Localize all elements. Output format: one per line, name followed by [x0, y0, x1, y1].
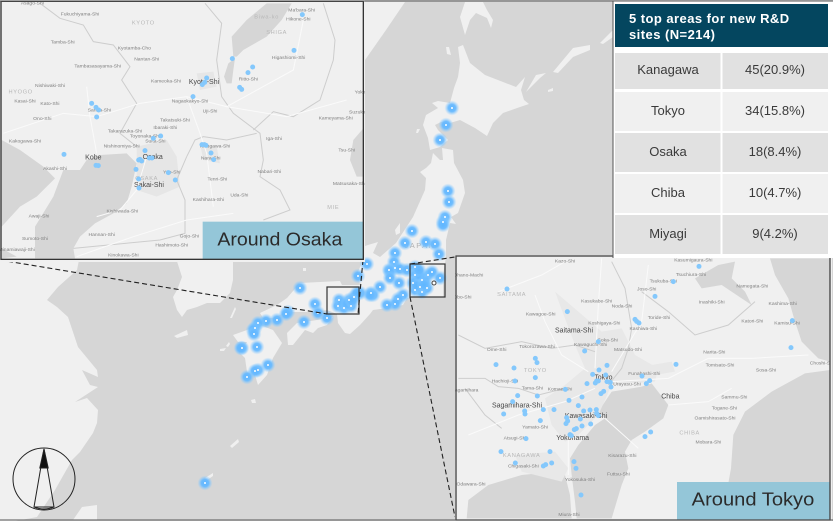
major city labels	[492, 328, 680, 442]
major city labels: Sakai-Shi	[134, 182, 164, 189]
map land: China coast	[0, 255, 98, 524]
city labels: Miura-Shi	[558, 512, 580, 518]
panel: top areas table	[613, 1, 833, 258]
city labels: Sumoto-Shi	[22, 236, 48, 242]
row: Tokyo: 34(15.8%)	[745, 103, 805, 118]
region labels: SHIGA	[266, 30, 287, 36]
label: Around Osaka: Around Osaka	[217, 228, 343, 249]
city labels: Gojo-Shi	[180, 234, 199, 240]
dashed zoom lines	[0, 257, 455, 517]
major city labels: Sagamihara-Shi	[492, 402, 542, 409]
city labels: Kisarazu-Shi	[608, 453, 636, 459]
major city labels: Osaka	[143, 154, 163, 161]
ring marker	[432, 281, 436, 285]
city labels: Akashi-Shi	[43, 166, 67, 172]
prefecture borders	[40, 3, 335, 248]
city labels: Sagamihara	[452, 388, 479, 394]
region labels: KYOTO	[132, 20, 155, 26]
major city labels: Saitama-Shi	[555, 328, 593, 335]
table heading	[615, 4, 828, 47]
city labels: Suzuka	[349, 109, 366, 115]
panel: inset map around Tokyo	[452, 255, 832, 521]
row: Chiba	[615, 174, 828, 213]
city labels: Nagaokakyo-Shi	[172, 99, 208, 105]
city labels: Tsuchiura-Shi	[676, 272, 706, 278]
white marker centres	[204, 107, 453, 484]
city labels: Soka-Shi	[598, 337, 618, 343]
label: Around Osaka	[203, 222, 363, 259]
urban areas	[532, 406, 602, 482]
region labels: CHIBA	[679, 430, 700, 436]
city labels: Sammu-Shi	[721, 395, 747, 401]
city labels: Obo-Shi	[453, 294, 471, 300]
city labels: Oamishirasato-Shi	[694, 416, 735, 422]
row: Tokyo: Tokyo	[651, 103, 685, 118]
city labels: Takarazuka-Shi	[108, 129, 142, 135]
city labels: Kameyama-Shi	[319, 115, 353, 121]
region labels	[8, 14, 339, 211]
city labels: Nishinomiya-Shi	[104, 143, 140, 149]
city labels: Matsudo-Shi	[614, 347, 642, 353]
row: Chiba: Chiba	[651, 185, 686, 200]
major city labels: Chiba	[661, 393, 680, 400]
table heading: 5 top areas for new R&D	[629, 11, 790, 26]
major city labels: Kyoto-Shi	[189, 79, 220, 86]
Osaka Bay and Seto Sea	[2, 3, 363, 258]
city labels: Kyotamba-Cho	[118, 45, 151, 51]
city labels: Nabari-Shi	[258, 169, 281, 175]
major city labels: Tokyo	[594, 374, 613, 381]
city labels: Tomisato-Shi	[706, 363, 734, 369]
city labels: Tama-Shi	[522, 386, 543, 392]
row: Kanagawa	[615, 53, 828, 89]
roads	[468, 258, 808, 475]
city labels: Kashiwa-Shi	[629, 326, 657, 332]
city labels: Tsu-Shi	[338, 148, 355, 154]
city labels: Hannan-Shi	[89, 232, 115, 238]
city labels: Koshigaya-Shi	[588, 320, 620, 326]
label: Around Tokyo: Around Tokyo	[692, 489, 814, 510]
city labels: Suita-Shi	[145, 138, 165, 144]
city labels: Joso-Shi	[637, 286, 656, 292]
city labels: Mobara-Shi	[695, 439, 721, 445]
city labels: Kamisu-Shi	[774, 321, 800, 327]
city labels: Ono-Shi	[33, 116, 51, 122]
region labels: MIE	[327, 205, 339, 211]
city labels: Ma'bara-Shi	[288, 8, 315, 14]
city labels: Higashiomi-Shi	[272, 55, 305, 61]
city labels: Kasai-Shi	[14, 99, 36, 105]
city labels: Hikone-Shi	[286, 17, 311, 23]
city labels: Tamba-Shi	[51, 40, 75, 46]
row: Kanagawa: Kanagawa	[637, 62, 699, 77]
row: Miyagi	[615, 215, 828, 254]
icon: north arrow compass	[13, 448, 75, 510]
city labels: Kasumigaura-Shi	[674, 258, 712, 264]
table heading: sites (N=214)	[629, 27, 715, 42]
site markers around Tokyo	[493, 264, 795, 497]
city labels: Kashihara-Shi	[193, 197, 224, 203]
map land: Korea	[173, 255, 233, 317]
label: Around Tokyo	[677, 482, 830, 520]
panel: inset map around Osaka	[0, 0, 366, 262]
city labels: Sanda-Shi	[88, 107, 111, 113]
city labels: Kameoka-Shi	[151, 78, 181, 84]
city labels: Namegata-Shi	[736, 284, 768, 290]
region labels: KANAGAWA	[503, 453, 540, 459]
Tokyo Bay, Sagami Bay, Pacific, Kasumigaura	[467, 258, 830, 520]
city labels: Futtsu-Shi	[607, 471, 630, 477]
city labels: Funabashi-Shi	[628, 371, 660, 377]
city labels: Yokk	[355, 89, 366, 95]
row: Chiba: 10(4.7%)	[749, 185, 801, 200]
city labels: Sosa-Shi	[756, 368, 776, 374]
city labels	[0, 0, 366, 259]
region labels	[497, 292, 700, 459]
bottom margin	[0, 521, 833, 524]
map land: Honshu	[260, 148, 465, 334]
region labels: OSAKA	[135, 176, 158, 182]
city labels: Hashimoto-Shi	[155, 242, 188, 248]
region labels: Biwa-ko	[254, 14, 279, 20]
city labels: Kinokawa-Shi	[108, 253, 139, 259]
city labels: Komae-Shi	[548, 386, 572, 392]
city labels: Ome-Shi	[487, 347, 507, 353]
city labels: Takatsuki-Shi	[160, 118, 190, 124]
city labels: Toride-Shi	[648, 315, 670, 321]
city labels: Kawagoe-Shi	[526, 312, 555, 318]
city labels: Iga-Shi	[266, 136, 282, 142]
city labels: Atsugi-Shi	[504, 436, 526, 442]
region labels: TOKYO	[524, 368, 547, 374]
city labels: Asago-Shi	[21, 0, 44, 6]
city labels: Uda-Shi	[230, 192, 248, 198]
major city labels: Kobe	[85, 155, 102, 162]
city labels: Kashima-Shi	[769, 301, 797, 307]
city labels: Noda-Shi	[612, 304, 632, 310]
city labels	[452, 258, 831, 518]
city labels: Katori-Shi	[741, 318, 763, 324]
city labels: Ibaraki-Shi	[153, 125, 177, 131]
map land: Shikoku	[287, 317, 333, 345]
map land: Russia, Sakhalin, Kurils and small islands	[73, 2, 613, 520]
map land: Hokkaido	[423, 45, 529, 150]
major city labels	[85, 79, 220, 189]
row: Tokyo	[615, 92, 828, 131]
map land: Kyushu	[233, 325, 282, 385]
city labels: Kakogawa-Shi	[9, 139, 41, 145]
city labels: Narita-Shi	[703, 350, 725, 356]
city labels: Ritto-Shi	[239, 76, 258, 82]
row: Osaka: 18(8.4%)	[749, 144, 801, 159]
region labels: HYOGO	[8, 89, 33, 95]
city labels: Ohano-Machi	[453, 273, 483, 279]
prefecture borders	[458, 262, 755, 428]
city labels: Nantan-Shi	[134, 56, 159, 62]
city labels: Chigasaki-Shi	[508, 464, 539, 470]
city labels: Uji-Shi	[203, 109, 217, 115]
country label: Japan: JAPAN	[404, 241, 436, 250]
city labels: Inashiki-Shi	[699, 299, 725, 305]
city labels: Tambasasayama-Shi	[74, 64, 121, 70]
city labels: Choshi-S	[810, 361, 831, 367]
city labels: Toyonaka-Shi	[130, 133, 160, 139]
city labels: Nara-Shi	[201, 156, 221, 162]
city labels: Togane-Shi	[712, 406, 737, 412]
city labels: Matsusaka-Shi	[333, 181, 366, 187]
region labels: SAITAMA	[497, 292, 526, 298]
city labels: Kato-Shi	[40, 101, 60, 107]
roads	[3, 20, 347, 257]
city labels: Hachioji-Shi	[492, 378, 518, 384]
city labels: Kishiwada-Shi	[107, 208, 138, 214]
city labels: Tokorozawa-Shi	[519, 344, 555, 350]
urban areas	[137, 72, 220, 197]
city labels: Nishiwaki-Shi	[35, 83, 65, 89]
major city labels: Kawasaki-Shi	[565, 413, 608, 420]
city labels: Kizugawa-Shi	[200, 143, 230, 149]
city labels: Tenri-Shi	[207, 176, 227, 182]
city labels: Tsukuba-Shi	[650, 279, 677, 285]
locator box: Tokyo area	[410, 264, 445, 297]
city labels: Kawaguchi-Shi	[574, 342, 607, 348]
city labels: Kazo-Shi	[555, 258, 575, 264]
row: Osaka	[615, 133, 828, 172]
locator box: Osaka area	[327, 287, 359, 314]
city labels: Fukuchiyama-Shi	[61, 12, 99, 18]
city labels: Yao-Shi	[163, 169, 180, 175]
row: Miyagi: 9(4.2%)	[752, 226, 798, 241]
city labels: Odawara-Shi	[456, 482, 486, 488]
row: Kanagawa: 45(20.9%)	[745, 62, 805, 77]
city labels: Yamato-Shi	[522, 424, 548, 430]
major city labels: Yokohama	[556, 435, 589, 442]
city labels: Urayasu-Shi	[613, 382, 641, 388]
city labels: Kasukabe-Shi	[581, 298, 612, 304]
city labels: Yokosuka-Shi	[565, 477, 595, 483]
site markers around Osaka	[61, 12, 305, 190]
city labels: Awaji-Shi	[29, 213, 49, 219]
site markers on main map	[198, 100, 460, 490]
row: Osaka: Osaka	[649, 144, 688, 159]
row: Miyagi: Miyagi	[649, 226, 687, 241]
